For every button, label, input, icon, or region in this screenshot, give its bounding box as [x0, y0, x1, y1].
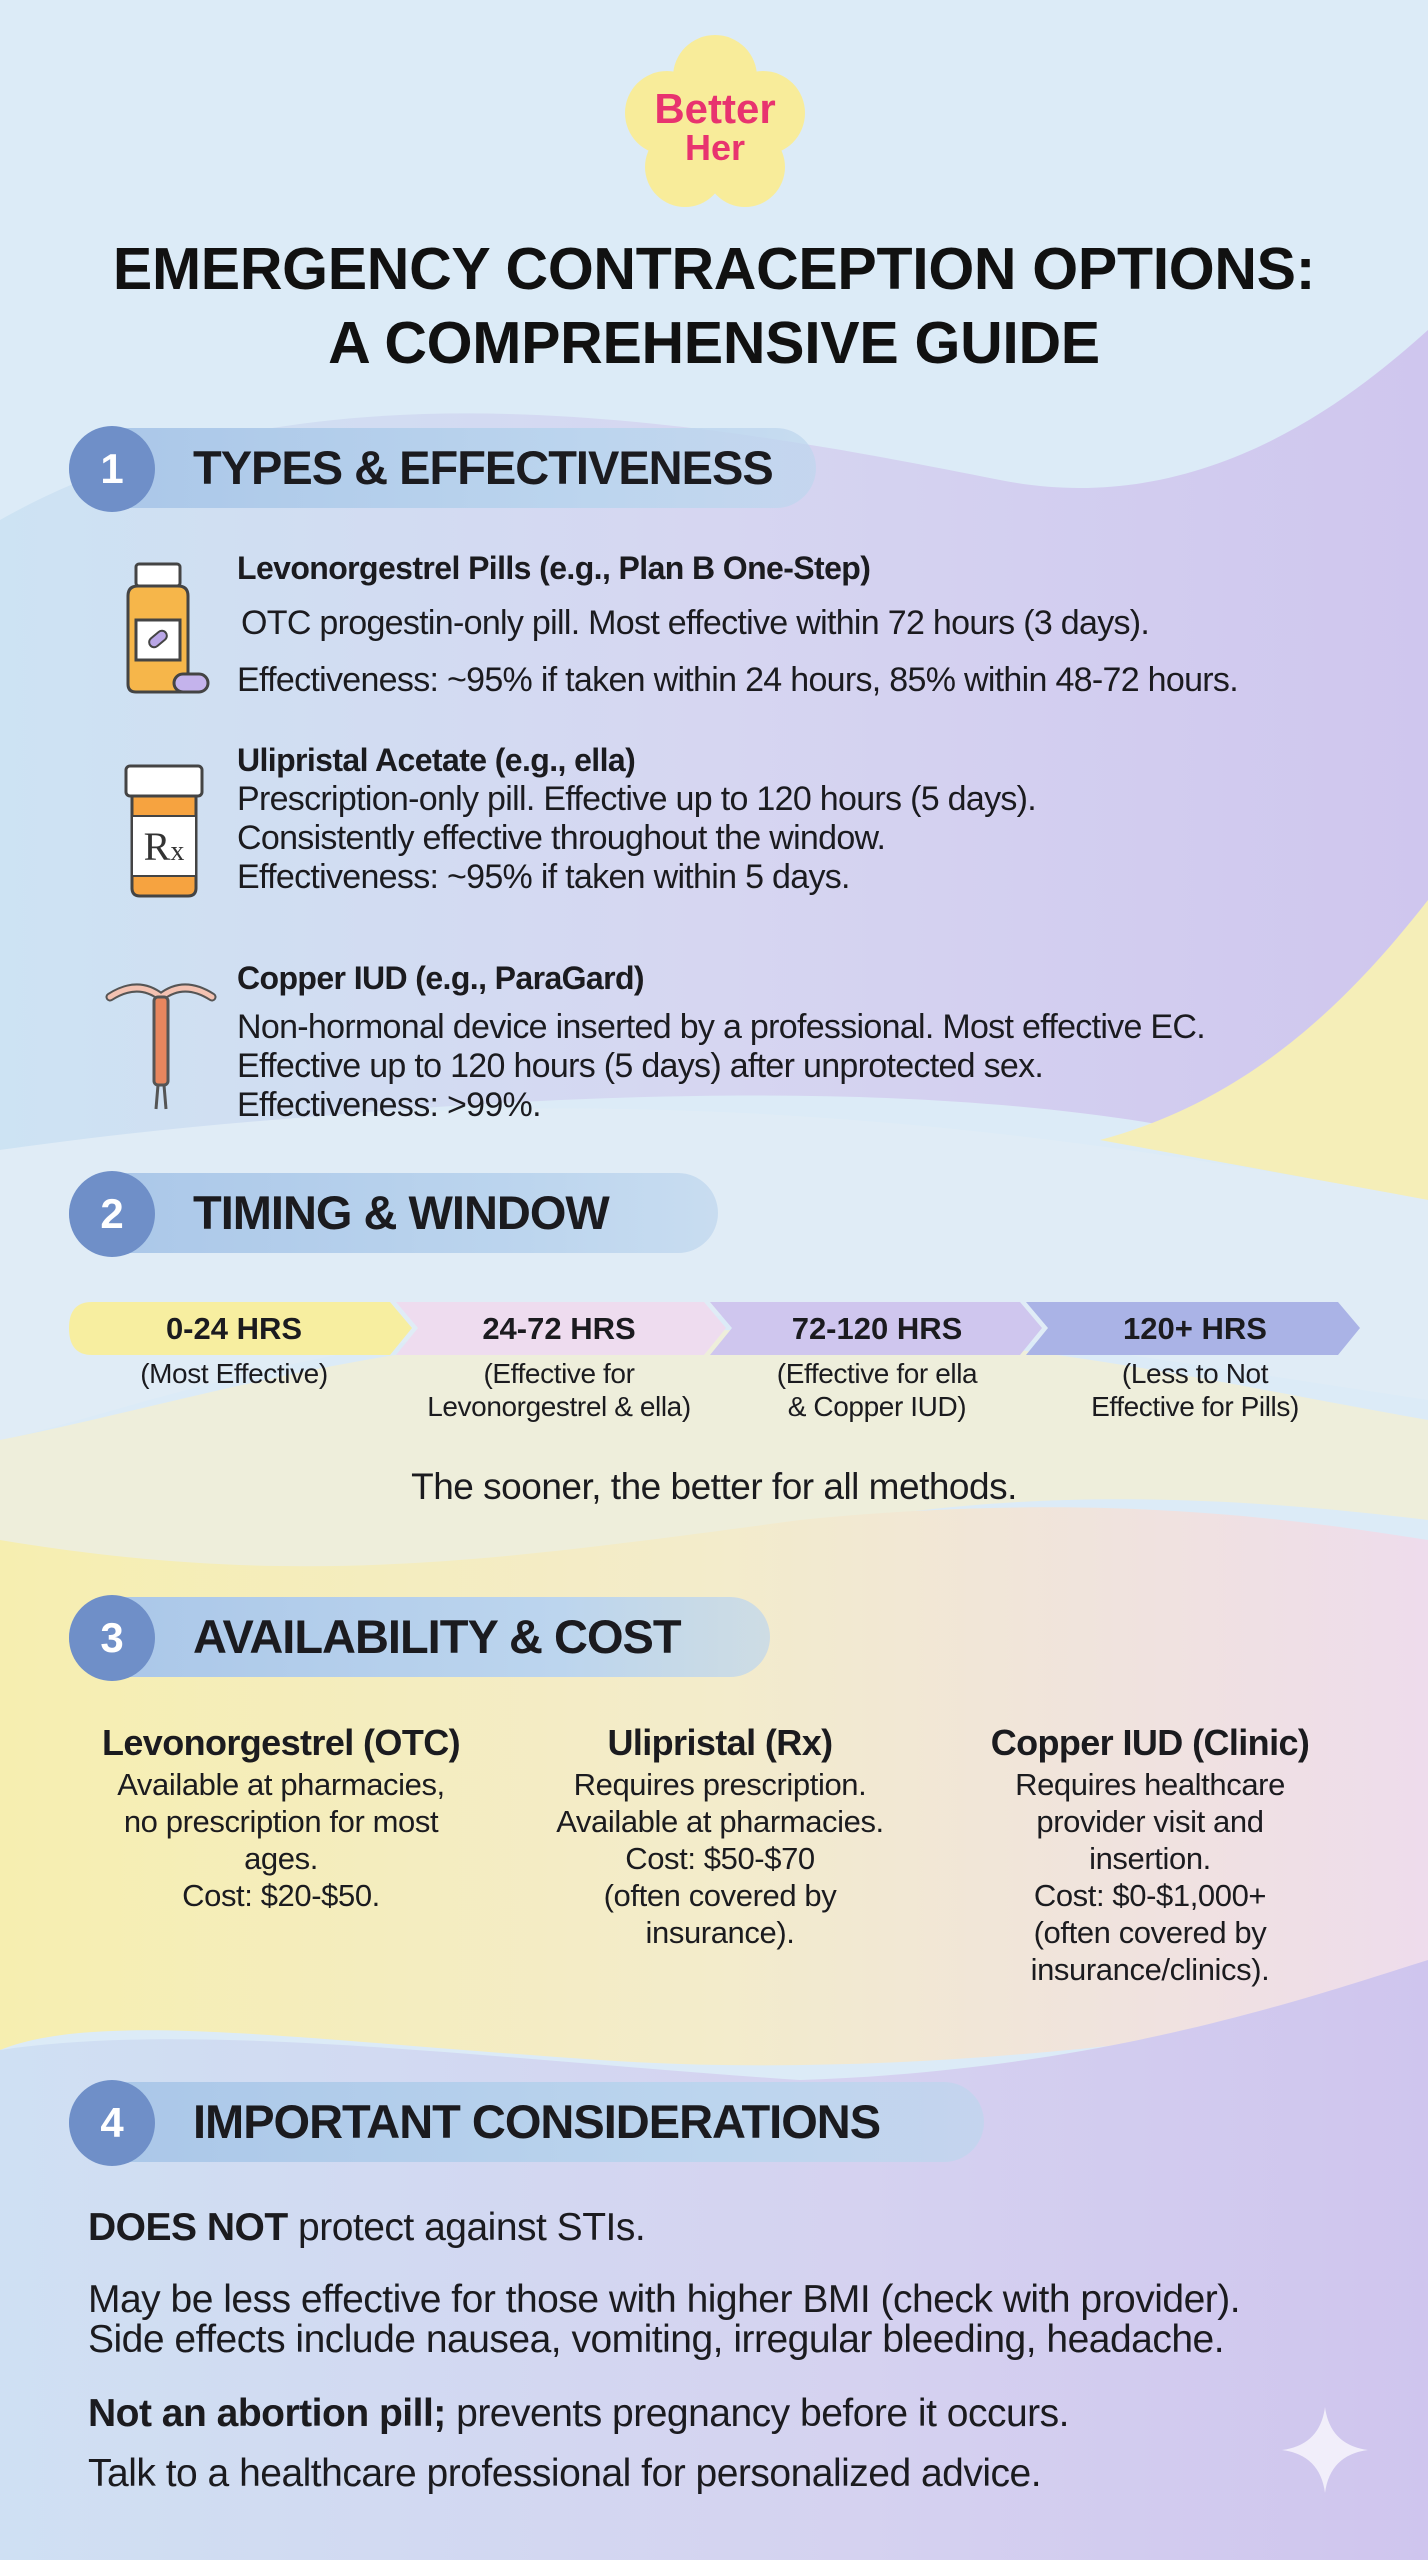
item: Ulipristal: Effectiveness: ~95% if taken within 5 days.: [237, 858, 850, 896]
column: Copper IUD: Requires healthcare: [1015, 1767, 1285, 1802]
column: Ulipristal: Cost: $50-$70: [625, 1841, 815, 1876]
text: 24-72 HRS: [482, 1311, 636, 1346]
considerations text: Talk to a healthcare professional for personalized advice.: [88, 2452, 1041, 2495]
timing note: The sooner, the better for all methods.: [411, 1466, 1017, 1507]
column: Levonorgestrel: Cost: $20-$50.: [182, 1878, 380, 1913]
section 3 header: AVAILABILITY & COST: [193, 1610, 681, 1663]
considerations text: [88, 2206, 1240, 2495]
section 2 header: TIMING & WINDOW: [193, 1186, 609, 1239]
item: Copper IUD: Copper IUD (e.g., ParaGard): [237, 960, 644, 996]
item: Levonorgestrel: Effectiveness: ~95% if taken within 24 hours, 85% within 48-72 hours.: [237, 661, 1238, 699]
title: [113, 236, 1315, 376]
icon: sparkle: [1283, 2408, 1368, 2492]
section 2 header: [69, 1173, 718, 1253]
icon: Rx bottle: Rx: [144, 824, 184, 869]
text: (Effective for: [483, 1358, 635, 1389]
text: (Less to Not: [1122, 1358, 1268, 1389]
text: (Effective for ella: [777, 1358, 977, 1389]
text: Effective for Pills): [1091, 1391, 1299, 1422]
column: Levonorgestrel: Levonorgestrel (OTC): [102, 1722, 460, 1763]
item: Levonorgestrel: OTC progestin-only pill. Most effective within 72 hours (3 days).: [241, 604, 1149, 642]
item: Ulipristal: Prescription-only pill. Effective up to 120 hours (5 days).: [237, 780, 1036, 818]
logo: Better Her: Her: [685, 127, 745, 168]
item: Copper IUD: Non-hormonal device inserted by a professional. Most effective EC.: [237, 1008, 1205, 1046]
title: EMERGENCY CONTRACEPTION OPTIONS:: [113, 236, 1315, 302]
text: Levonorgestrel & ella): [427, 1391, 691, 1422]
item: Ulipristal: [237, 742, 1036, 896]
column: Levonorgestrel: no prescription for most: [124, 1804, 438, 1839]
logo: Better Her: [625, 35, 805, 207]
column: Levonorgestrel: [102, 1722, 460, 1913]
item: Ulipristal: Consistently effective throughout the window.: [237, 819, 885, 857]
column: Copper IUD: provider visit and: [1036, 1804, 1264, 1839]
column: Ulipristal: Requires prescription.: [574, 1767, 866, 1802]
section 1 header: 1: [100, 445, 124, 492]
title: A COMPREHENSIVE GUIDE: [328, 310, 1100, 376]
column: Copper IUD: (often covered by: [1034, 1915, 1266, 1950]
item: Copper IUD: Effective up to 120 hours (5 days) after unprotected sex.: [237, 1047, 1043, 1085]
text: 120+ HRS: [1123, 1311, 1267, 1346]
column: Copper IUD: [991, 1722, 1309, 1987]
text: (Most Effective): [140, 1358, 328, 1389]
column: Copper IUD: insurance/clinics).: [1031, 1952, 1269, 1987]
column: Copper IUD: insertion.: [1089, 1841, 1211, 1876]
column: Levonorgestrel: Available at pharmacies,: [117, 1767, 445, 1802]
timeline: [69, 1302, 1360, 1355]
considerations text: Not an abortion pill; prevents pregnancy before it occurs.: [88, 2392, 1069, 2435]
considerations text: Side effects include nausea, vomiting, irregular bleeding, headache.: [88, 2318, 1224, 2361]
text: 72-120 HRS: [792, 1311, 962, 1346]
item: Levonorgestrel: [237, 550, 1238, 699]
section 1 header: TYPES & EFFECTIVENESS: [193, 441, 773, 494]
column: Copper IUD: Copper IUD (Clinic): [991, 1722, 1309, 1763]
considerations text: May be less effective for those with higher BMI (check with provider).: [88, 2278, 1240, 2321]
section 3 header: 3: [100, 1614, 124, 1661]
section 1 header: [69, 428, 816, 508]
item: Copper IUD: [237, 960, 1205, 1124]
item: Ulipristal: Ulipristal Acetate (e.g., ella): [237, 742, 635, 778]
icon: copper IUD: [106, 983, 216, 1110]
column: Ulipristal: Available at pharmacies.: [556, 1804, 884, 1839]
section 4 header: 4: [100, 2099, 124, 2146]
item: Levonorgestrel: Levonorgestrel Pills (e.g., Plan B One-Step): [237, 550, 870, 586]
considerations text: DOES NOT protect against STIs.: [88, 2206, 645, 2249]
column: Ulipristal: [556, 1722, 884, 1950]
text: & Copper IUD): [788, 1391, 966, 1422]
section 2 header: 2: [100, 1190, 124, 1237]
icon: Rx bottle: [124, 764, 204, 898]
section 3 header: [69, 1597, 770, 1677]
column: Levonorgestrel: ages.: [244, 1841, 318, 1876]
timeline labels: 0-24 HRS: [166, 1311, 302, 1346]
column: Ulipristal: insurance).: [646, 1915, 794, 1950]
section 4 header: [69, 2082, 984, 2162]
item: Copper IUD: Effectiveness: >99%.: [237, 1086, 541, 1124]
column: Ulipristal: (often covered by: [604, 1878, 836, 1913]
column: Ulipristal: Ulipristal (Rx): [607, 1722, 833, 1763]
column: Copper IUD: Cost: $0-$1,000+: [1034, 1878, 1266, 1913]
section 4 header: IMPORTANT CONSIDERATIONS: [193, 2095, 880, 2148]
icon: pill bottle: [126, 562, 210, 694]
logo: Better Her: Better: [654, 85, 776, 132]
